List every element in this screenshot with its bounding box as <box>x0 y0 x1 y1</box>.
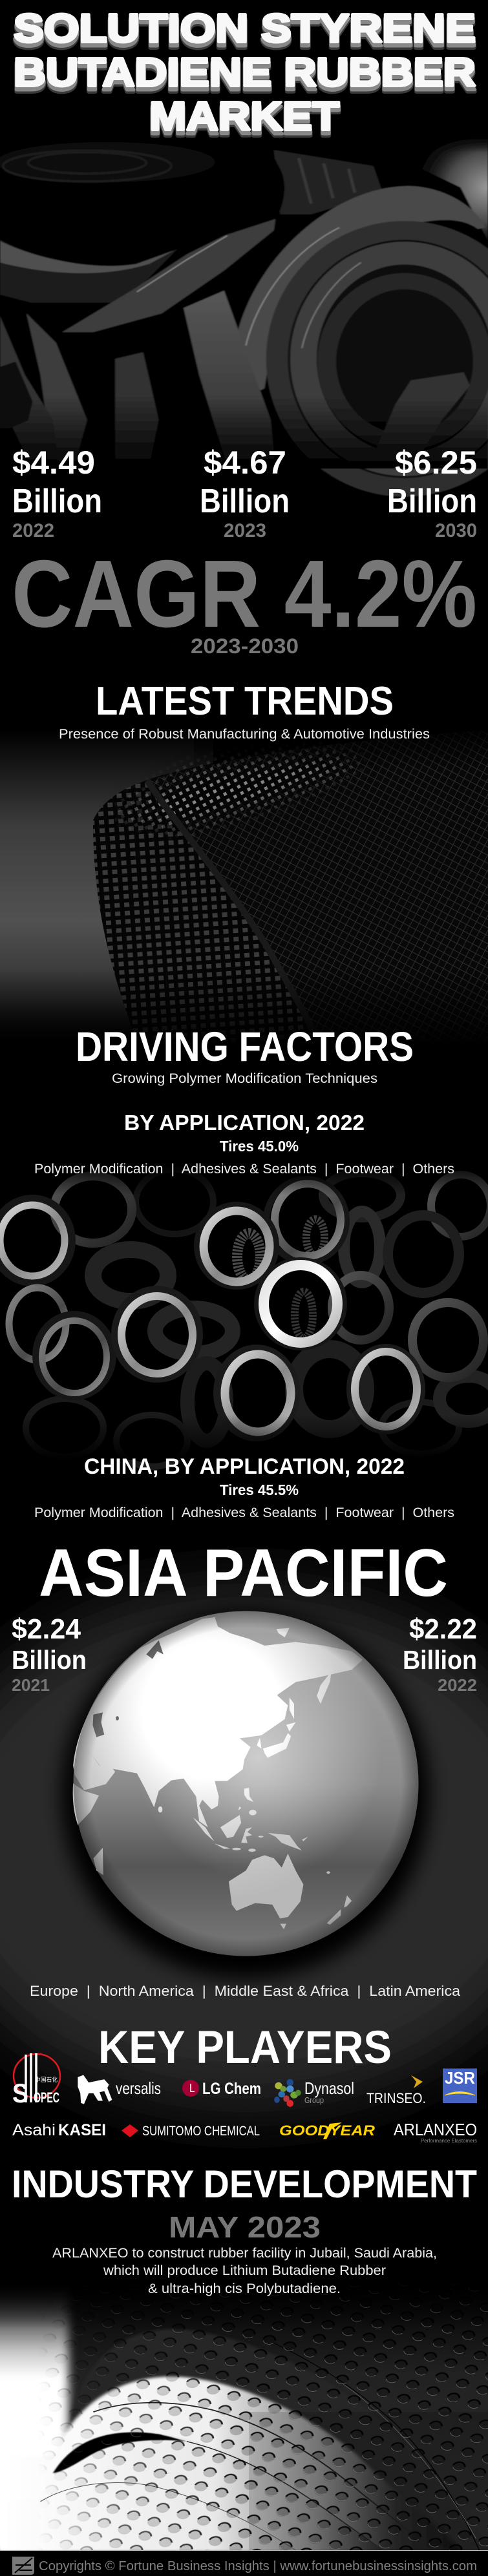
text: development detail: ARLANXEO to construct rubber facility in Jubail, Saudi Arabia, <box>52 2246 437 2261</box>
heading: key players: KEY PLAYERS <box>98 2022 392 2073</box>
stat: Asia Pacific 2022: Billion <box>403 1645 477 1675</box>
stat: Asia Pacific 2021: $2.24 <box>12 1613 81 1645</box>
logo: Dynasol Group: Group <box>304 2095 324 2105</box>
logo: versalis <box>78 2075 161 2104</box>
heading: China by application: CHINA, BY APPLICATION, 2022 <box>84 1454 405 1479</box>
logo: JSR: JSR <box>445 2068 475 2088</box>
list: China application segments: Polymer Modification | Adhesives & Sealants | Footwear | Others <box>34 1505 454 1520</box>
logo: Trinseo <box>366 2075 426 2106</box>
globe landmasses <box>73 1617 363 1929</box>
stat: 2030 market size: 2030 <box>435 520 477 541</box>
stat: 2023 market size: 2023 <box>224 520 266 541</box>
CAGR figure: 2023-2030 <box>191 634 299 658</box>
tires image <box>0 1163 488 1467</box>
globe <box>61 1611 430 1979</box>
logo: Sumitomo Chemical: SUMITOMO CHEMICAL <box>142 2124 260 2139</box>
heading: latest trends: LATEST TRENDS <box>96 679 394 724</box>
logo: LG Chem <box>182 2080 261 2098</box>
logo: Goodyear: GOODYEAR <box>279 2122 375 2139</box>
title <box>14 6 476 145</box>
title: SOLUTION STYRENE <box>14 12 476 57</box>
heading: Asia Pacific: ASIA PACIFIC <box>39 1536 448 1611</box>
logo: LG Chem: LG Chem <box>202 2080 261 2098</box>
logo: Dynasol Group <box>274 2079 354 2107</box>
stat: 2030 market size <box>387 445 477 541</box>
logo: Dynasol Group: Dynasol <box>304 2079 354 2098</box>
logo: Sinopec: OPEC <box>34 2089 59 2106</box>
stat: 2030 market size: $6.25 <box>395 445 477 481</box>
stat: Asia Pacific 2021: Billion <box>12 1645 87 1675</box>
text: development detail: which will produce Lithium Butadiene Rubber <box>103 2263 386 2278</box>
stat: Asia Pacific 2022: $2.22 <box>409 1613 477 1645</box>
logo: JSR <box>443 2068 477 2103</box>
logo: Trinseo: TRINSEO. <box>366 2090 426 2106</box>
logo: Sumitomo Chemical <box>122 2124 260 2139</box>
title: BUTADIENE RUBBER <box>14 54 476 99</box>
stat: 2022 market size: Billion <box>12 483 102 520</box>
text: development detail <box>52 2246 437 2296</box>
text: copyright line: Copyrights © Fortune Business Insights | www.fortunebusinessinsights.com <box>39 2559 477 2573</box>
logo: Arlanxeo: ARLANXEO <box>394 2120 477 2139</box>
stat: Asia Pacific 2021: 2021 <box>12 1675 50 1695</box>
title: MARKET <box>149 98 339 143</box>
mesh image: rubber tube <box>0 732 488 1036</box>
title: MARKET <box>149 100 339 145</box>
logo: Asahi Kasei <box>12 2121 106 2139</box>
stat: 2023 market size: $4.67 <box>204 445 286 481</box>
stat: Asia Pacific 2022 <box>403 1613 477 1695</box>
logo: Asahi Kasei: Asahi <box>12 2121 56 2139</box>
footer <box>0 2550 488 2576</box>
hero image: rubber coils <box>0 134 488 487</box>
stat: Asia Pacific 2021 <box>12 1613 87 1695</box>
stat: tires share: Tires 45.0% <box>220 1138 299 1155</box>
title: BUTADIENE RUBBER <box>14 56 476 101</box>
bottom image: perforated rubber sheet <box>0 2281 488 2550</box>
date: May 2023: MAY 2023 <box>169 2210 321 2244</box>
logo: Arlanxeo: Performance Elastomers <box>421 2138 477 2144</box>
title: MARKET <box>149 94 339 139</box>
icon: Fortune Business Insights logo <box>12 2557 34 2575</box>
stat: 2023 market size: Billion <box>200 483 290 520</box>
stat: Asia Pacific 2022: 2022 <box>438 1675 477 1695</box>
stat: China tires share: Tires 45.5% <box>220 1482 299 1498</box>
stat: 2022 market size: $4.49 <box>12 445 95 481</box>
text: development detail: & ultra-high cis Polybutadiene. <box>148 2281 341 2296</box>
stat: 2022 market size: 2022 <box>12 520 54 541</box>
logo: Asahi Kasei: KASEI <box>58 2121 106 2139</box>
text: driving factors detail: Growing Polymer Modification Techniques <box>112 1071 377 1086</box>
text: latest trends detail: Presence of Robust Manufacturing & Automotive Industries <box>59 727 430 742</box>
logo: Sinopec <box>12 2053 60 2108</box>
title: BUTADIENE RUBBER <box>14 50 476 95</box>
regional backdrop glow <box>0 1589 488 2106</box>
logo: versalis: versalis <box>116 2079 161 2098</box>
stat: 2023 market size <box>200 445 290 541</box>
Caspian Sea and inland water <box>92 1640 164 1737</box>
title: SOLUTION STYRENE <box>14 10 476 55</box>
heading: driving factors: DRIVING FACTORS <box>76 1023 414 1070</box>
stat: 2030 market size: Billion <box>387 483 477 520</box>
stat: 2022 market size <box>12 445 102 541</box>
logo: Sinopec: 中国石化 <box>35 2076 58 2083</box>
heading: by application: BY APPLICATION, 2022 <box>124 1111 365 1135</box>
list: application segments: Polymer Modification | Adhesives & Sealants | Footwear | Others <box>34 1162 454 1177</box>
title: SOLUTION STYRENE <box>14 6 476 51</box>
list: other regions: Europe | North America | Middle East & Africa | Latin America <box>30 1983 461 1999</box>
logo: Sinopec: S <box>12 2078 28 2108</box>
